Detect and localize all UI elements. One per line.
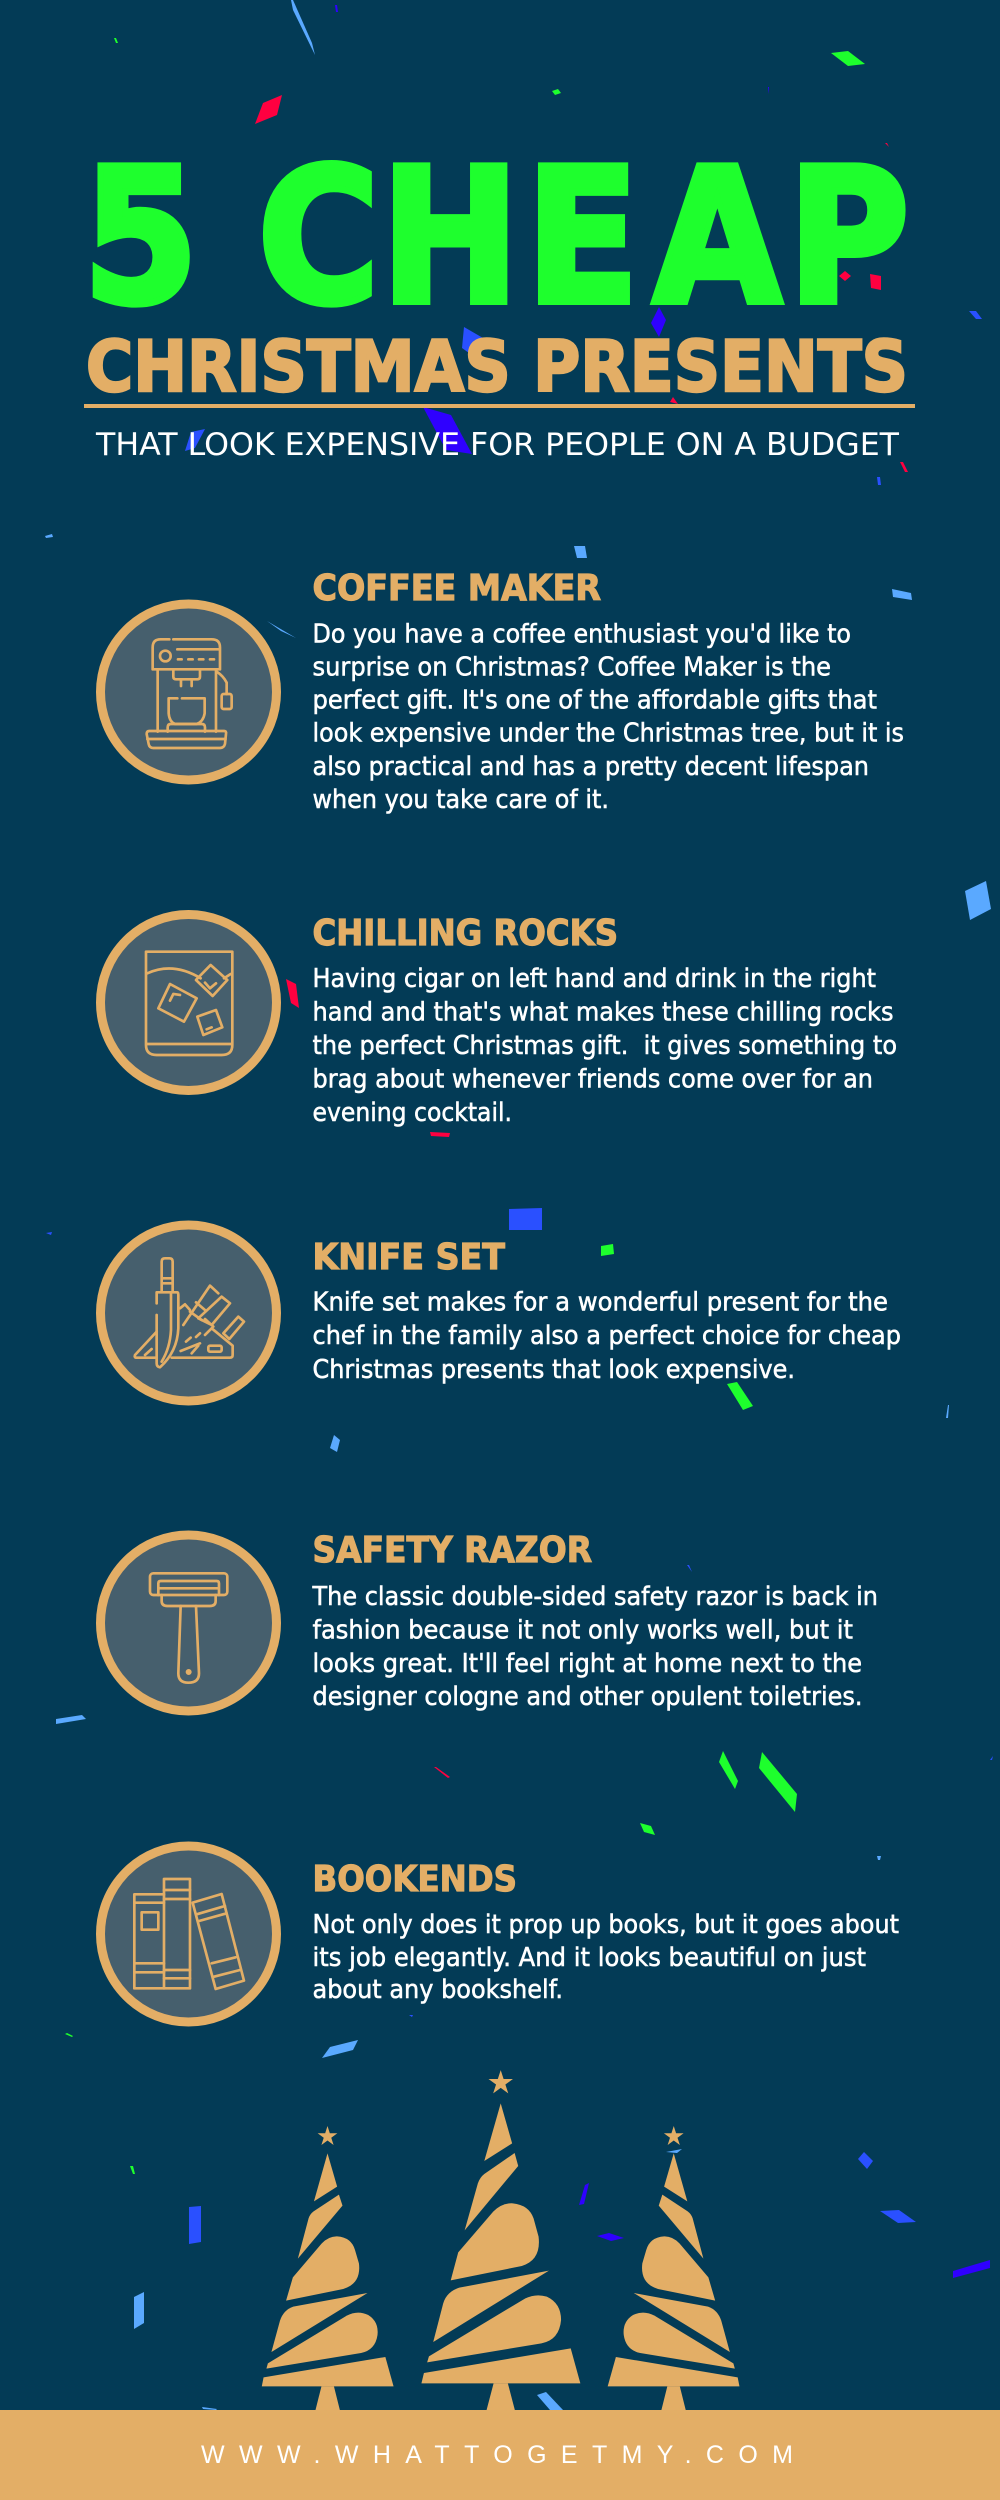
text block: coffee maker: surprise on Christmas? Coffee Maker is the: [312, 652, 831, 682]
text block: chilling rocks: Having cigar on left hand and drink in the right: [312, 964, 876, 994]
text block: chilling rocks: evening cocktail.: [312, 1098, 512, 1128]
text block: knife set: Christmas presents that look expensive.: [312, 1355, 795, 1385]
panel: coffee maker: [100, 568, 904, 815]
text block: chilling rocks: [312, 964, 897, 1128]
panel: safety razor: [100, 1530, 878, 1712]
heading: knife set: KNIFE SET: [312, 1237, 505, 1278]
text block: safety razor: fashion because it not only works well, but it: [312, 1616, 853, 1646]
text block: bookends: about any bookshelf.: [312, 1975, 563, 2005]
title line: 5 cheap: 5 CHEAP: [83, 129, 909, 346]
text block: chilling rocks: the perfect Christmas gift. it gives something to: [312, 1031, 897, 1061]
text block: safety razor: looks great. It'll feel right at home next to the: [312, 1649, 862, 1679]
icon: knife block: [100, 1225, 276, 1401]
left tree: [262, 2126, 394, 2411]
footer url: WWW.WHATTOGETMY.COM: [201, 2441, 793, 2469]
text block: chilling rocks: brag about whenever friends come over for an: [312, 1064, 873, 1094]
text block: coffee maker: when you take care of it.: [312, 785, 609, 815]
text block: coffee maker: [312, 620, 904, 815]
text block: coffee maker: perfect gift. It's one of the affordable gifts that: [312, 686, 877, 716]
panel: knife set: [100, 1225, 901, 1401]
heading: chilling rocks: CHILLING ROCKS: [312, 913, 618, 954]
text block: coffee maker: also practical and has a pretty decent lifespan: [312, 752, 869, 782]
right tree: [608, 2126, 739, 2411]
heading: coffee maker: COFFEE MAKER: [312, 568, 601, 609]
text block: chilling rocks: hand and that's what makes these chilling rocks: [312, 998, 894, 1028]
text block: safety razor: designer cologne and other opulent toiletries.: [312, 1682, 862, 1712]
panel: chilling rocks: [100, 913, 897, 1128]
text block: knife set: Knife set makes for a wonderful present for the: [312, 1288, 888, 1318]
text block: safety razor: The classic double-sided safety razor is back in: [312, 1582, 878, 1612]
text block: bookends: [312, 1910, 899, 2005]
text block: coffee maker: look expensive under the Christmas tree, but it is: [312, 718, 904, 748]
icon: razor: [100, 1535, 276, 1711]
panel: bookends: [100, 1846, 899, 2022]
icon: glass with ice: [100, 914, 276, 1090]
text block: knife set: [312, 1288, 901, 1385]
title line: christmas presents: CHRISTMAS PRESENTS: [86, 326, 908, 408]
heading: safety razor: SAFETY RAZOR: [312, 1530, 592, 1571]
icon: books: [100, 1846, 276, 2022]
text block: bookends: Not only does it prop up books, but it goes about: [312, 1910, 899, 1940]
text block: bookends: its job elegantly. And it looks beautiful on just: [312, 1943, 866, 1973]
title: [83, 129, 915, 463]
icon: coffee maker: [100, 604, 276, 780]
text block: coffee maker: Do you have a coffee enthusiast you'd like to: [312, 620, 851, 650]
text block: knife set: chef in the family also a perfect choice for cheap: [312, 1321, 901, 1351]
illustration: christmas trees: [262, 2070, 739, 2411]
footer bar: [0, 2410, 1000, 2500]
center tree: [421, 2070, 580, 2411]
title underline: [84, 404, 915, 408]
subtitle: THAT LOOK EXPENSIVE FOR PEOPLE ON A BUDGET: [95, 427, 900, 463]
heading: bookends: BOOKENDS: [312, 1859, 517, 1900]
text block: safety razor: [312, 1582, 878, 1712]
